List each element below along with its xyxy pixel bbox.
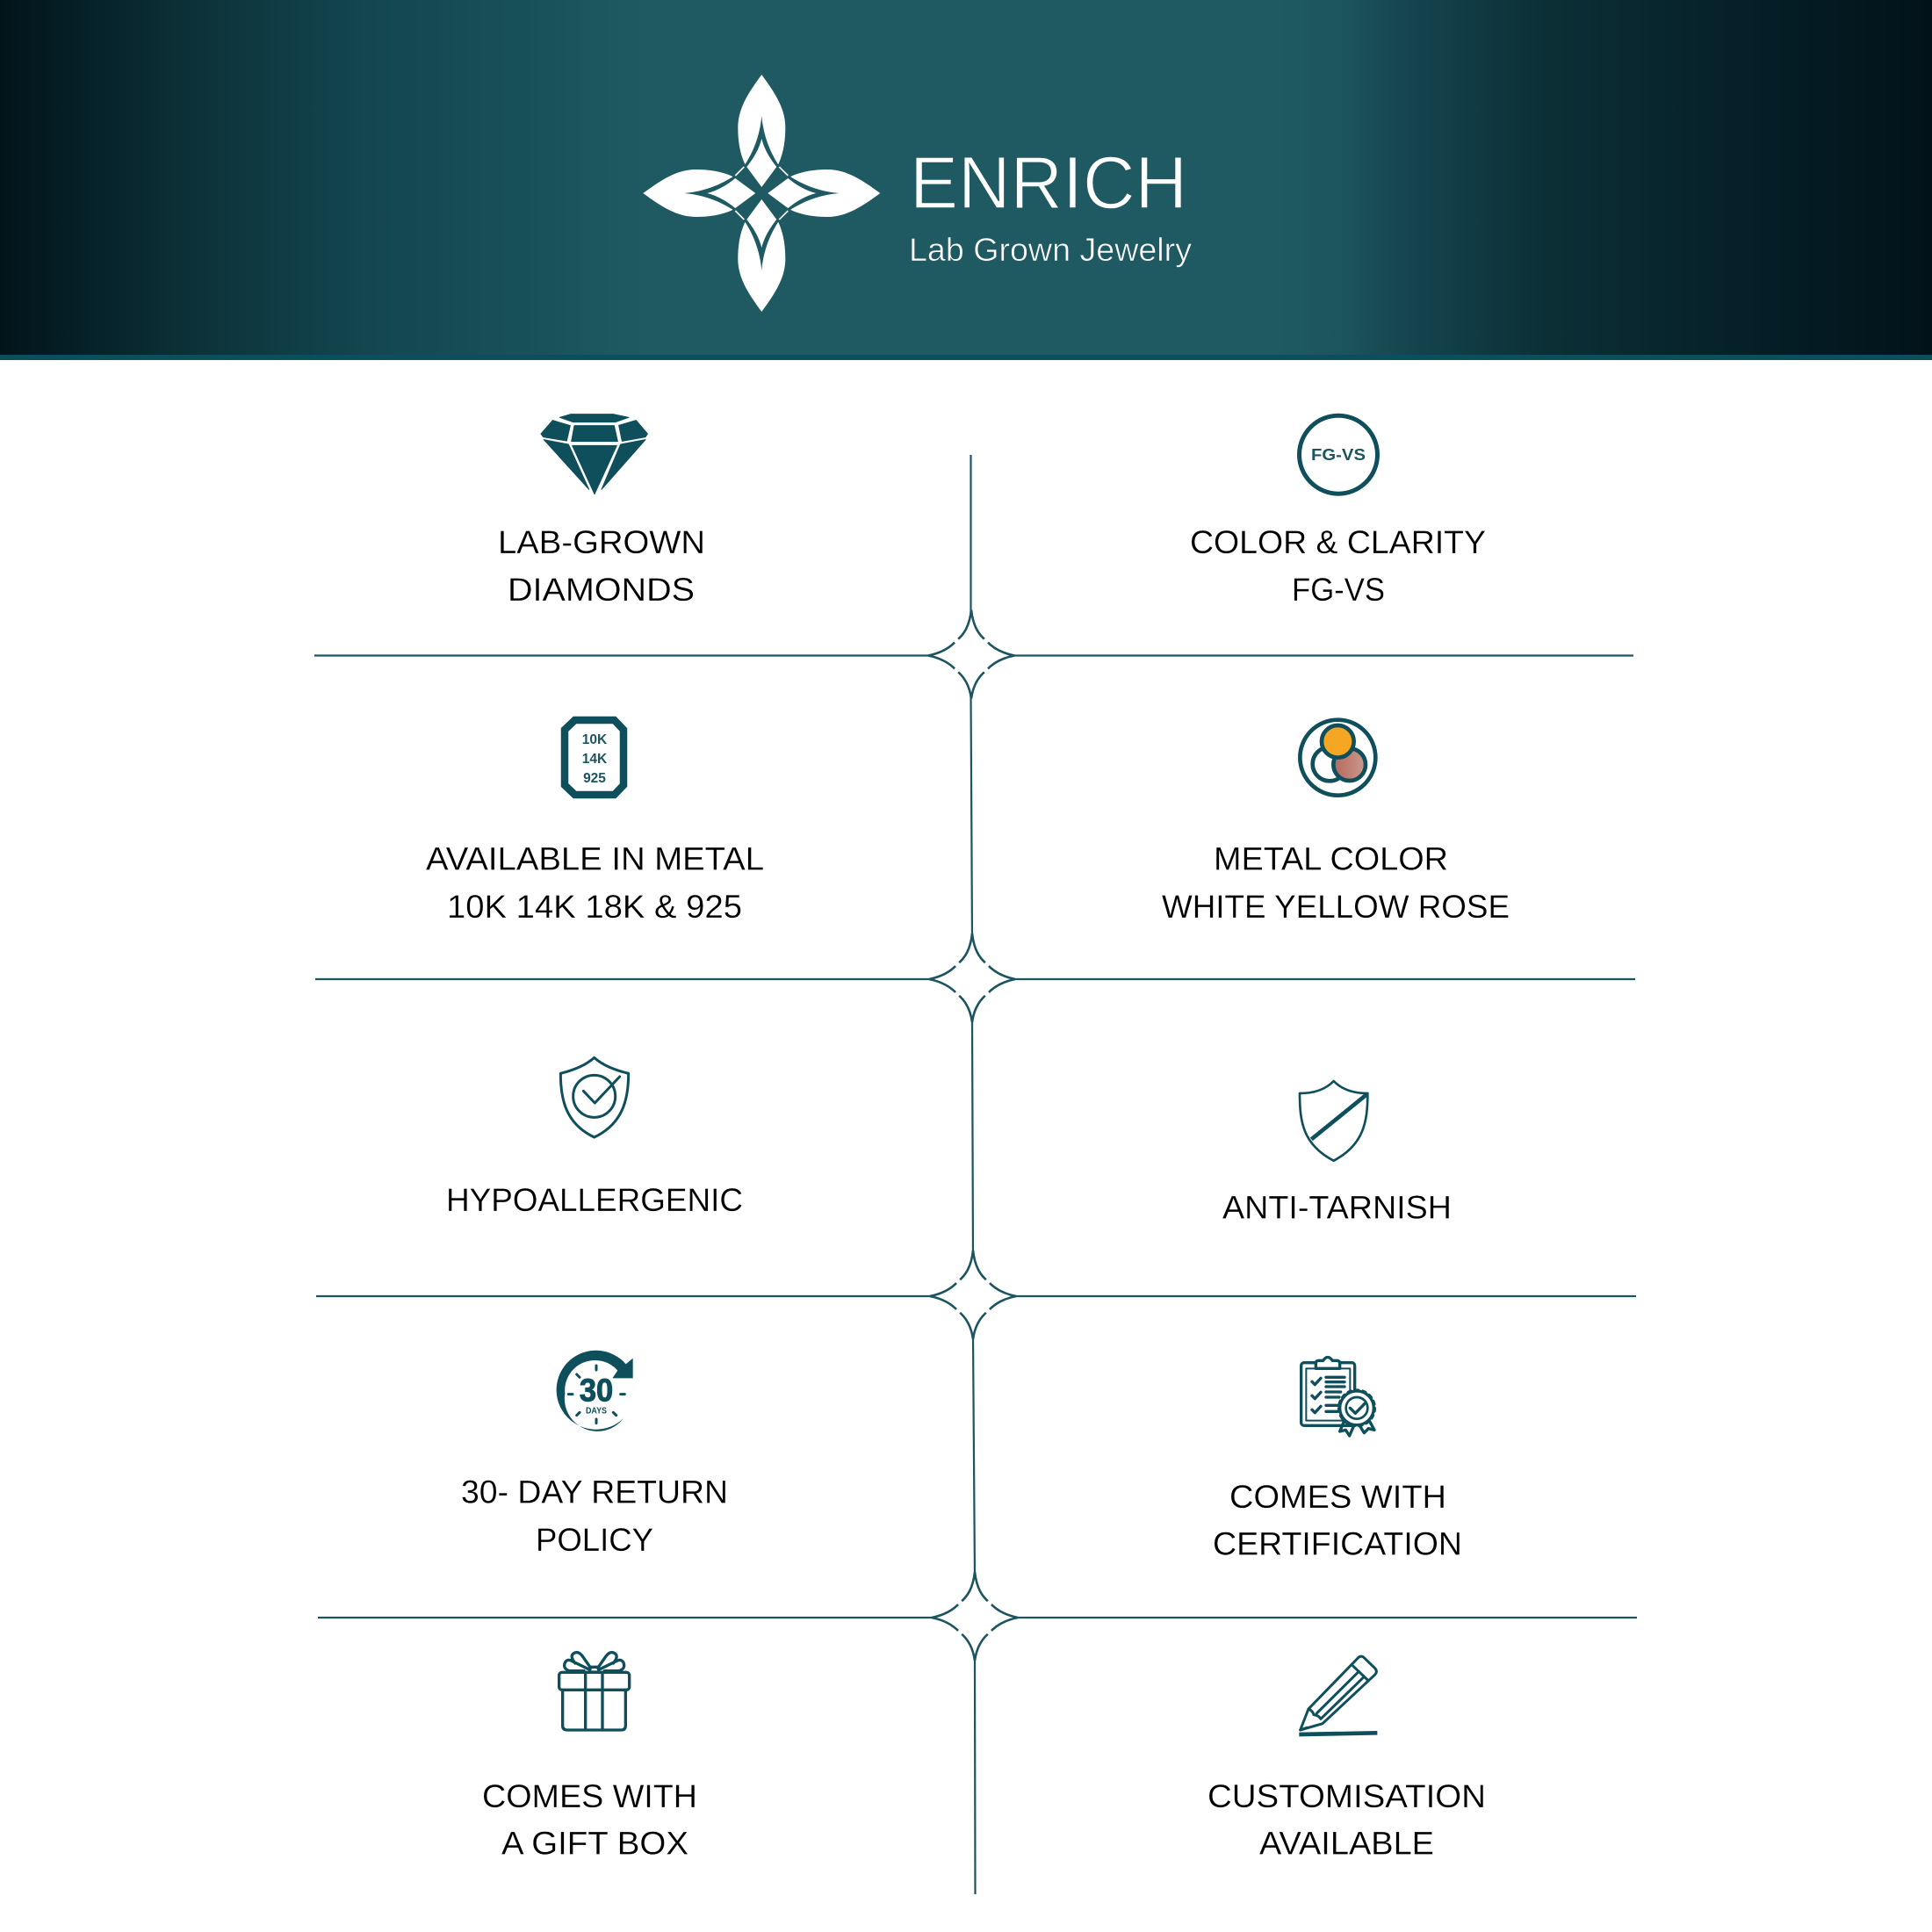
star connector 3: [930, 1251, 1016, 1339]
header banner: [0, 0, 1932, 360]
horizontal dividers: [314, 655, 1637, 1618]
icon: 30 days return: DAYS: [586, 1406, 607, 1416]
label: customisation available: [1208, 1778, 1486, 1862]
label: color and clarity: [1190, 524, 1486, 608]
brand name: ENRICH: [910, 141, 1187, 224]
icon: metal karat octagon: 10K: [582, 732, 608, 747]
label: 30-day return policy: [461, 1474, 728, 1558]
label: comes with a gift box: COMES WITH: [482, 1778, 697, 1814]
label: comes with a gift box: A GIFT BOX: [501, 1825, 688, 1862]
label: comes with certification: [1213, 1479, 1462, 1561]
icon: metal karat octagon: 925: [583, 771, 606, 786]
label: color and clarity: FG-VS: [1292, 572, 1385, 608]
label: comes with certification: CERTIFICATION: [1213, 1526, 1462, 1561]
icon: shield with check: [560, 1057, 629, 1137]
icon: 30 days return: 30: [580, 1372, 613, 1408]
icon: brand logo flower: [643, 75, 880, 312]
icon: FG-VS badge: FG-VS: [1311, 446, 1366, 464]
icon: certificate clipboard: [1301, 1357, 1375, 1436]
label: hypoallergenic: HYPOALLERGENIC: [446, 1182, 743, 1218]
icon: FG-VS badge: [1300, 415, 1377, 494]
label: anti-tarnish: ANTI-TARNISH: [1222, 1189, 1452, 1226]
star connector 1: [928, 609, 1014, 699]
label: 30-day return policy: POLICY: [536, 1522, 653, 1558]
icon: 30 days return: [557, 1351, 633, 1431]
label: metal color: METAL COLOR: [1214, 841, 1448, 876]
icon: metal colors: [1300, 720, 1375, 796]
label: customisation available: CUSTOMISATION: [1208, 1778, 1486, 1814]
icon: anti-tarnish shield: [1300, 1081, 1367, 1161]
label: lab-grown diamonds: DIAMONDS: [508, 572, 695, 608]
label: comes with certification: COMES WITH: [1229, 1479, 1446, 1515]
star connector 4: [932, 1572, 1018, 1661]
label: lab-grown diamonds: [498, 524, 705, 608]
label: comes with a gift box: [482, 1778, 697, 1862]
icon: gift box: [559, 1653, 630, 1730]
vertical divider: [971, 455, 975, 1894]
label: available in metal: [426, 841, 764, 925]
brand tagline: Lab Grown Jewelry: [909, 232, 1193, 268]
label: metal color: [1162, 841, 1510, 925]
label: customisation available: AVAILABLE: [1259, 1825, 1434, 1862]
star connector 2: [929, 934, 1015, 1022]
label: lab-grown diamonds: LAB-GROWN: [498, 524, 705, 560]
label: available in metal: AVAILABLE IN METAL: [426, 841, 764, 876]
icon: diamond: [541, 415, 647, 494]
icon: metal karat octagon: 14K: [582, 752, 608, 767]
label: metal color: WHITE YELLOW ROSE: [1162, 889, 1510, 925]
label: color and clarity: COLOR & CLARITY: [1190, 524, 1486, 560]
icon: pencil: [1299, 1656, 1377, 1734]
label: 30-day return policy: 30- DAY RETURN: [461, 1474, 728, 1510]
label: available in metal: 10K 14K 18K & 925: [447, 889, 742, 925]
icon: metal karat octagon: [565, 720, 624, 795]
